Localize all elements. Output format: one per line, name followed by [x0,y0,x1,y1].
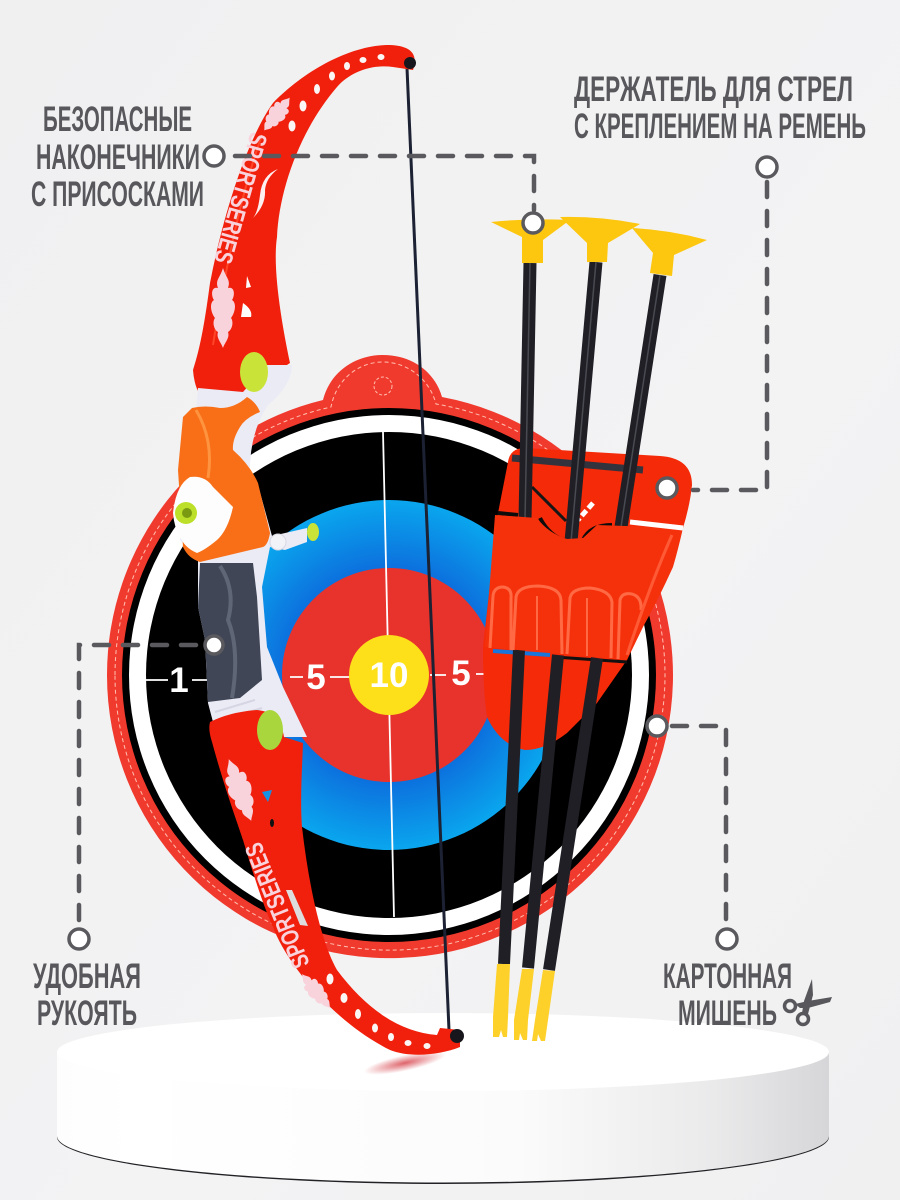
arrow 3 [532,228,707,1041]
label: handle [33,957,141,1033]
target numbers: 10 [370,656,408,695]
arrow 1 [491,219,570,1037]
flame decoration [295,969,337,1013]
callout lines [79,156,767,925]
label: safe tips: С ПРИСОСКАМИ [31,175,204,214]
target numbers: 1 [169,661,189,700]
holes [288,54,384,132]
podium [57,1013,829,1184]
label: safe tips [31,100,204,214]
label: handle: УДОБНАЯ [33,957,141,996]
cardboard target [107,355,673,958]
lower limb [209,710,464,1055]
upper limb [193,45,415,395]
flame decoration [257,92,297,136]
flame decoration [218,755,262,825]
target numbers: 5 [451,654,471,693]
lower limb: SPORTSERIES [240,838,316,972]
grip [198,563,262,702]
label: handle: РУКОЯТЬ [37,994,137,1033]
arrows [491,217,707,1041]
bow [173,45,464,1055]
flame decoration [211,268,235,348]
label: quiver [574,70,866,146]
swoosh [253,169,278,218]
label: cardboard target [663,957,792,1033]
label: safe tips: НАКОНЕЧНИКИ [36,138,200,177]
label: safe tips: БЕЗОПАСНЫЕ [43,100,192,139]
icon: scissors [784,979,832,1024]
quiver back plate [483,448,692,750]
label: cardboard target: КАРТОННАЯ [663,957,792,996]
target numbers [169,654,471,700]
eye blob [173,477,233,553]
quiver front pocket [485,515,683,660]
arrow 2 [514,217,640,1040]
label: cardboard target: МИШЕНЬ [678,994,777,1033]
target numbers: 5 [306,658,326,697]
bow string [407,68,449,1030]
riser [173,352,319,745]
callout markers [69,146,777,949]
upper limb: SPORTSERIES [208,129,272,267]
